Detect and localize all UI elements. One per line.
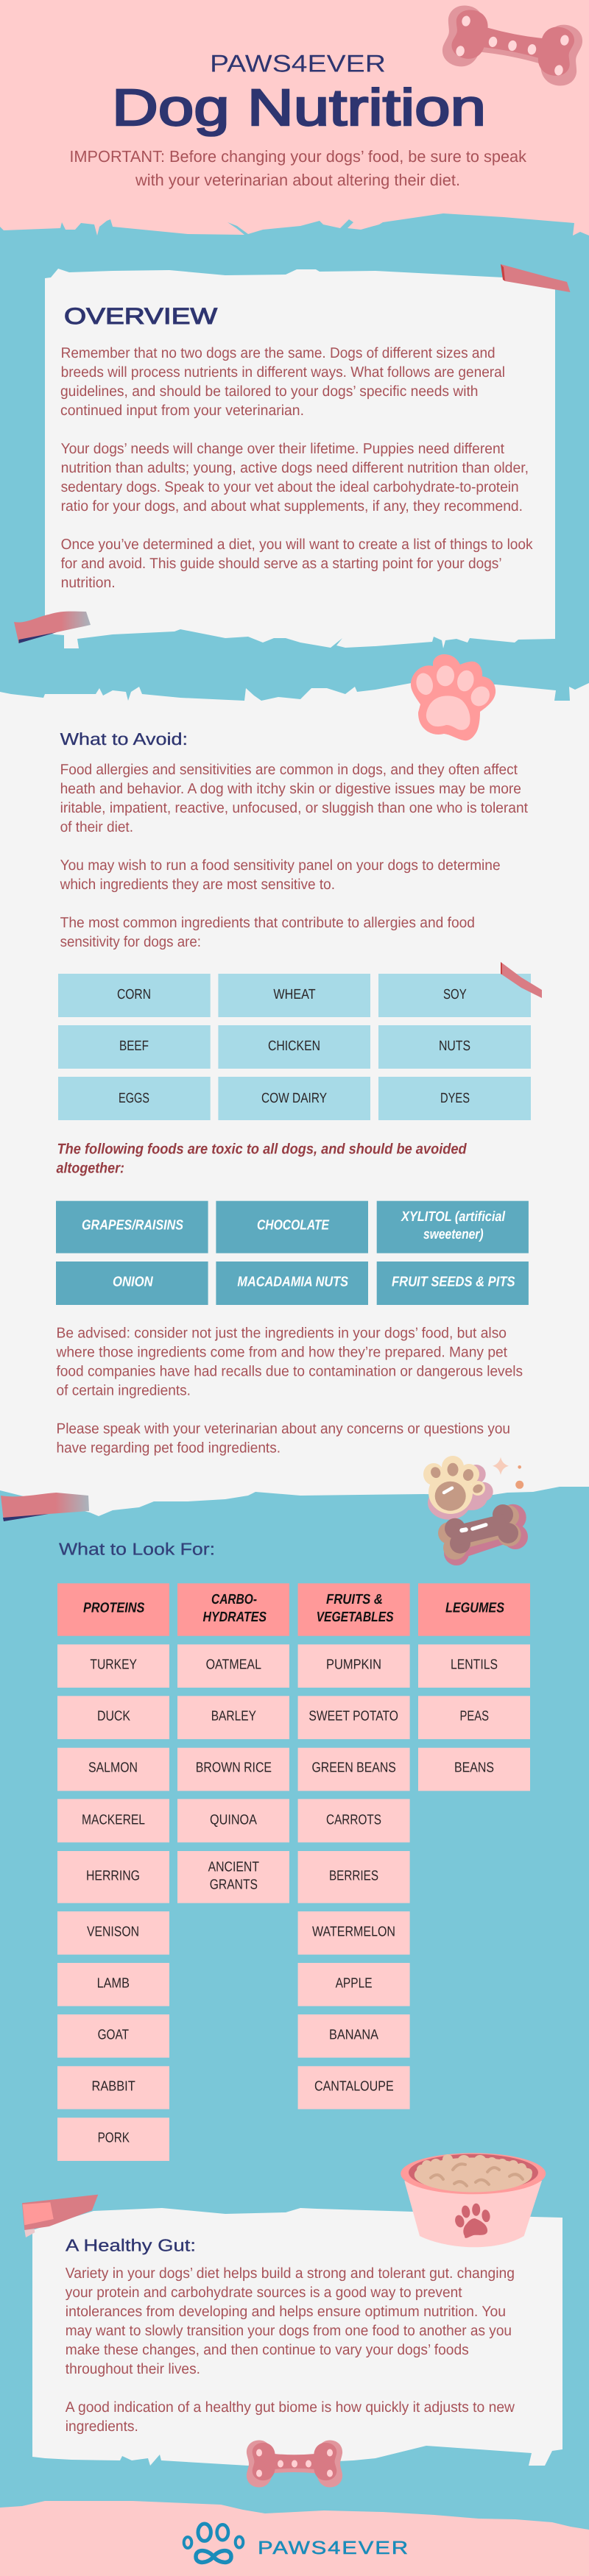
text: allergies intro: which ingredients they are most sensitive to. (60, 877, 335, 893)
heading: what to avoid: What to Avoid: (60, 729, 188, 749)
food cells: PEAS (459, 1709, 489, 1724)
overview text: nutrition than adults; young, active dogs need different nutrition than older, (61, 460, 529, 476)
overview text: for and avoid. This guide should serve as a starting point for your dogs’ (61, 556, 502, 572)
food cells: OATMEAL (206, 1657, 261, 1673)
overview text: Once you’ve determined a diet, you will want to create a list of things to look (61, 537, 534, 553)
overview text: guidelines, and should be tailored to your dogs’ specific needs with (60, 383, 479, 400)
text: sourcing advice: where those ingredients come from and how they’re prepared. Many pet (56, 1345, 507, 1361)
food cells: WATERMELON (312, 1925, 395, 1940)
icon: large pink paw (411, 654, 495, 740)
grid: common allergens: BEEF (119, 1038, 149, 1054)
text: allergies intro (60, 762, 528, 950)
text: allergies intro: The most common ingredients that contribute to allergies and food (60, 915, 475, 931)
text: sourcing advice (56, 1326, 523, 1457)
grid: common allergens: COW DAIRY (261, 1091, 327, 1106)
food cells: LENTILS (451, 1657, 498, 1673)
panel: what to avoid background (0, 683, 589, 1516)
grid: toxic foods: sweetener) (423, 1227, 484, 1242)
grid: toxic foods (56, 1201, 529, 1305)
text: toxic foods warning: The following foods are toxic to all dogs, and should be avoided (57, 1142, 467, 1158)
text: healthy gut body: Variety in your dogs’ diet helps build a strong and tolerant gut. changing (66, 2265, 515, 2282)
footer brand name: PAWS4EVER (258, 2538, 409, 2558)
footer logo (184, 2524, 409, 2562)
grid: toxic foods: MACADAMIA NUTS (237, 1275, 348, 1290)
text: sourcing advice: Please speak with your veterinarian about any concerns or questions you (56, 1421, 510, 1437)
overview text: sedentary dogs. Speak to your vet about the ideal carbohydrate-to-protein (61, 479, 519, 495)
food cells: HERRING (86, 1868, 140, 1883)
text: sourcing advice: have regarding pet food ingredients. (56, 1440, 281, 1457)
food cells: LAMB (97, 1976, 130, 1992)
column headers: FRUITS & (326, 1592, 383, 1607)
food cells: QUINOA (210, 1812, 257, 1827)
food cells: BARLEY (211, 1709, 256, 1724)
column headers: HYDRATES (203, 1610, 267, 1625)
food cells: VENISON (87, 1925, 139, 1940)
food cells: GRANTS (210, 1878, 258, 1893)
text: allergies intro: heath and behavior. A dog with itchy skin or digestive issues may be more (60, 781, 521, 797)
overview text: continued input from your veterinarian. (60, 403, 304, 419)
food cells: BEANS (454, 1761, 494, 1776)
grid: common allergens: CHICKEN (268, 1038, 320, 1054)
ribbon: what to look for left (1, 1493, 89, 1521)
text: healthy gut body: your protein and carbohydrate sources is a good way to prevent (66, 2285, 462, 2301)
overview text: Your dogs’ needs will change over their lifetime. Puppies need different (61, 441, 504, 457)
ribbon: overview top right (501, 264, 570, 292)
important note: with your veterinarian about altering their diet. (135, 171, 460, 189)
text: healthy gut body: ingredients. (66, 2418, 138, 2435)
icon: paw infinity mark (184, 2524, 243, 2562)
text: healthy gut body (66, 2265, 515, 2435)
column headers: VEGETABLES (317, 1610, 394, 1625)
grid: toxic foods: XYLITOL (artificial (401, 1209, 506, 1225)
icon: large chew bone (440, 3, 585, 88)
icon: treat bone (438, 1504, 528, 1565)
text: healthy gut body: intolerances from developing and helps ensure optimum nutrition. You (66, 2304, 506, 2320)
icon: food bowl (401, 2153, 546, 2247)
food cells: PUMPKIN (326, 1657, 381, 1673)
food cells: RABBIT (91, 2079, 135, 2095)
food cells: CANTALOUPE (314, 2079, 394, 2095)
text: allergies intro: sensitivity for dogs are: (60, 934, 201, 950)
food cells: TURKEY (90, 1657, 137, 1673)
text: allergies intro: of their diet. (60, 819, 133, 835)
panel: healthy gut card (32, 2208, 562, 2466)
panel: pink footer background (0, 2501, 589, 2576)
food cells: ANCIENT (208, 1860, 259, 1875)
overview text (60, 345, 534, 591)
icon: small chew bone (247, 2441, 342, 2488)
panel: overview card (45, 269, 555, 648)
food cells: DUCK (97, 1709, 130, 1724)
grid: common allergens: DYES (440, 1091, 470, 1106)
overview text: Remember that no two dogs are the same. Dogs of different sizes and (61, 345, 495, 361)
heading: a healthy gut: A Healthy Gut: (66, 2235, 196, 2254)
overview text: ratio for your dogs, and about what supplements, if any, they recommend. (61, 498, 523, 514)
grid: foods to look for (57, 1583, 530, 2161)
grid: common allergens: CORN (117, 987, 151, 1002)
overview text: breeds will process nutrients in different ways. What follows are general (61, 364, 505, 381)
text: allergies intro: iritable, impatient, reactive, unfocused, or sluggish than one who is tolerant (60, 800, 528, 816)
ribbon: healthy gut top left (22, 2195, 98, 2237)
grid: toxic foods: FRUIT SEEDS & PITS (392, 1275, 515, 1290)
text: healthy gut body: make these changes, and then continue to vary your dogs’ foods (66, 2342, 469, 2358)
ribbon: overview bottom left (14, 612, 91, 643)
text: sourcing advice: food companies have had recalls due to contamination or dangerous levels (56, 1364, 523, 1380)
panel: pink header background (0, 0, 589, 236)
important note (69, 147, 527, 189)
title: Dog Nutrition (112, 79, 486, 136)
grid: toxic foods: CHOCOLATE (257, 1218, 330, 1234)
brand name: PAWS4EVER (210, 50, 386, 77)
food cells: GOAT (98, 2028, 129, 2043)
food cells: PORK (98, 2131, 130, 2146)
food cells: SALMON (88, 1761, 138, 1776)
overview text: nutrition. (61, 575, 116, 591)
icon: cream paw print with sparkles (423, 1456, 523, 1520)
text: toxic foods warning: altogether: (56, 1161, 124, 1177)
title block (69, 50, 527, 189)
ribbon: on allergen grid (501, 962, 542, 998)
food cells: MACKEREL (82, 1812, 145, 1827)
food cells (57, 1644, 530, 2161)
text: sourcing advice: Be advised: consider not just the ingredients in your dogs’ food, but also (56, 1326, 507, 1342)
text: allergies intro: Food allergies and sensitivities are common in dogs, and they often affect (60, 762, 518, 778)
text: healthy gut body: throughout their lives. (66, 2361, 200, 2377)
column headers: PROTEINS (83, 1601, 145, 1616)
food cells: BROWN RICE (196, 1761, 272, 1776)
text: healthy gut body: A good indication of a healthy gut biome is how quickly it adjusts to new (66, 2399, 515, 2416)
text: allergies intro: You may wish to run a food sensitivity panel on your dogs to determine (60, 857, 501, 874)
overview heading: OVERVIEW (64, 303, 218, 329)
grid: common allergens: SOY (443, 987, 467, 1002)
food cells: CARROTS (326, 1812, 381, 1827)
food cells: BERRIES (329, 1868, 378, 1883)
food cells: APPLE (336, 1976, 373, 1992)
food cells: BANANA (329, 2028, 378, 2043)
text: toxic foods warning (56, 1142, 467, 1177)
heading: what to look for: What to Look For: (59, 1540, 215, 1559)
grid: common allergens: WHEAT (273, 987, 316, 1002)
text: sourcing advice: of certain ingredients. (56, 1383, 191, 1399)
grid: toxic foods: GRAPES/RAISINS (82, 1218, 183, 1234)
grid: common allergens (58, 974, 531, 1120)
column headers: CARBO- (211, 1592, 257, 1607)
column headers: LEGUMES (445, 1601, 504, 1616)
food cells: SWEET POTATO (308, 1709, 398, 1724)
important note: IMPORTANT: Before changing your dogs’ food, be sure to speak (69, 147, 527, 166)
text: healthy gut body: may want to slowly transition your dogs from one food to another as you (66, 2323, 512, 2339)
grid: toxic foods: ONION (113, 1275, 154, 1290)
grid: common allergens: EGGS (119, 1091, 149, 1106)
grid: common allergens: NUTS (439, 1038, 470, 1054)
food cells: GREEN BEANS (312, 1761, 396, 1776)
column headers (57, 1583, 530, 1636)
